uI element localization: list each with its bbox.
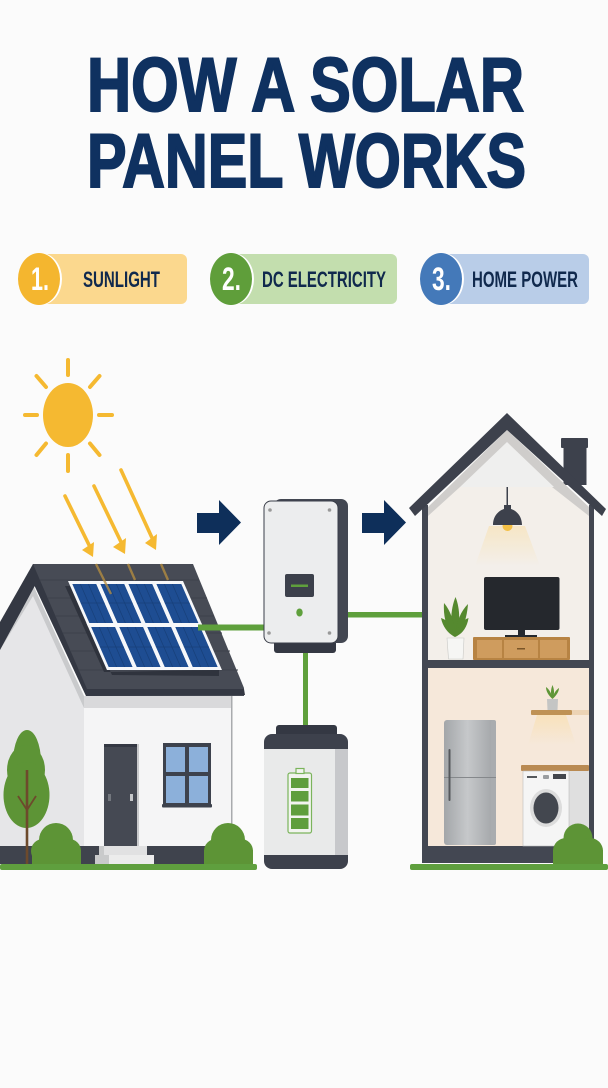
house side gable wall (0, 585, 84, 846)
washing machine (523, 771, 569, 846)
step 1: sunlight badge: 1. (31, 261, 49, 297)
bush right (204, 823, 253, 864)
lower room wall (428, 668, 589, 846)
chimney (561, 438, 588, 485)
kitchen counter and cabinet (521, 765, 589, 846)
window (162, 743, 212, 808)
tree (4, 730, 50, 864)
arrow: panel to inverter (197, 500, 241, 545)
step 1: sunlight badge (18, 253, 187, 305)
pendant lamp (475, 487, 540, 566)
solar panel (65, 581, 222, 676)
television (484, 577, 560, 638)
green wires (198, 612, 423, 726)
battery (264, 725, 348, 869)
icon: sun (25, 360, 112, 471)
foundation (0, 846, 232, 864)
arrows: sun rays onto the roof (65, 470, 157, 557)
refrigerator (444, 720, 496, 845)
outer walls and floors (422, 505, 594, 863)
door (104, 744, 139, 846)
step 2: DC electricity badge: 2. (222, 261, 241, 297)
step 2: DC electricity badge: DC ELECTRICITY (262, 267, 386, 292)
inverter display (285, 574, 314, 597)
bush by right house (553, 824, 603, 864)
wall shelf with plant (528, 685, 589, 745)
step 1: sunlight badge: SUNLIGHT (83, 267, 160, 292)
TV cabinet (473, 637, 570, 660)
step 3: home power badge (420, 253, 589, 305)
house front wall (84, 696, 232, 846)
faded ray shadows on roof (96, 564, 168, 594)
bush left (31, 823, 81, 864)
grass (0, 864, 257, 870)
step 3: home power badge: 3. (432, 261, 451, 297)
step 2: DC electricity badge (210, 253, 397, 305)
arrow: inverter to home (362, 500, 406, 545)
roof (0, 564, 245, 696)
right house cross-section (409, 413, 608, 870)
house roof (409, 413, 606, 516)
left house with solar panel (0, 564, 257, 870)
title (87, 43, 526, 204)
grass strip (410, 864, 608, 870)
inverter (264, 499, 348, 653)
battery level icon (288, 768, 312, 833)
potted plant (441, 597, 468, 659)
upper room wall (428, 430, 589, 660)
door steps (95, 846, 154, 864)
attic (428, 430, 589, 516)
